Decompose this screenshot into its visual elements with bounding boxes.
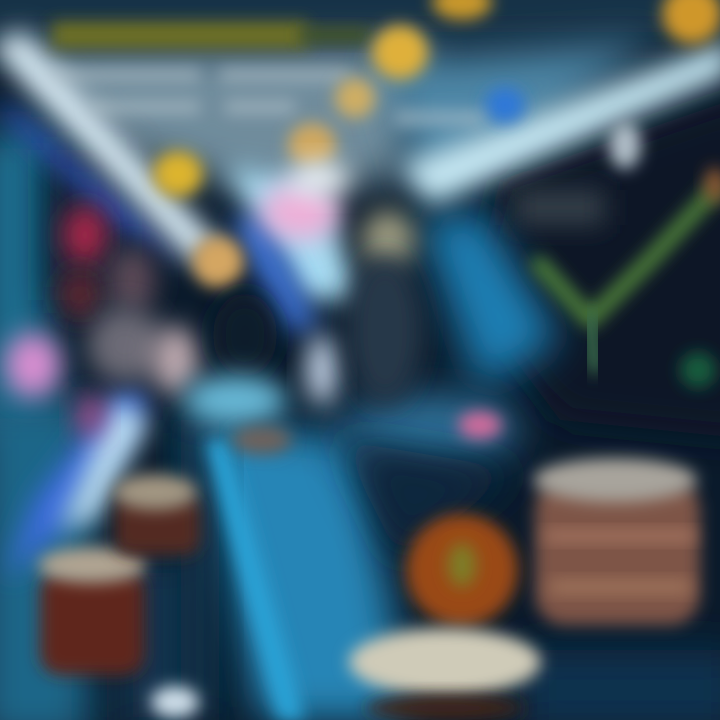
orange globe xyxy=(349,514,541,720)
line chart xyxy=(515,121,720,388)
central glow xyxy=(260,162,352,406)
heading bar xyxy=(52,22,370,48)
centre dark figure xyxy=(183,255,502,454)
bottom glow xyxy=(151,686,199,718)
left column blobs xyxy=(5,205,199,437)
coin stacks xyxy=(38,458,700,675)
text lines xyxy=(50,68,485,126)
coins xyxy=(153,0,720,288)
